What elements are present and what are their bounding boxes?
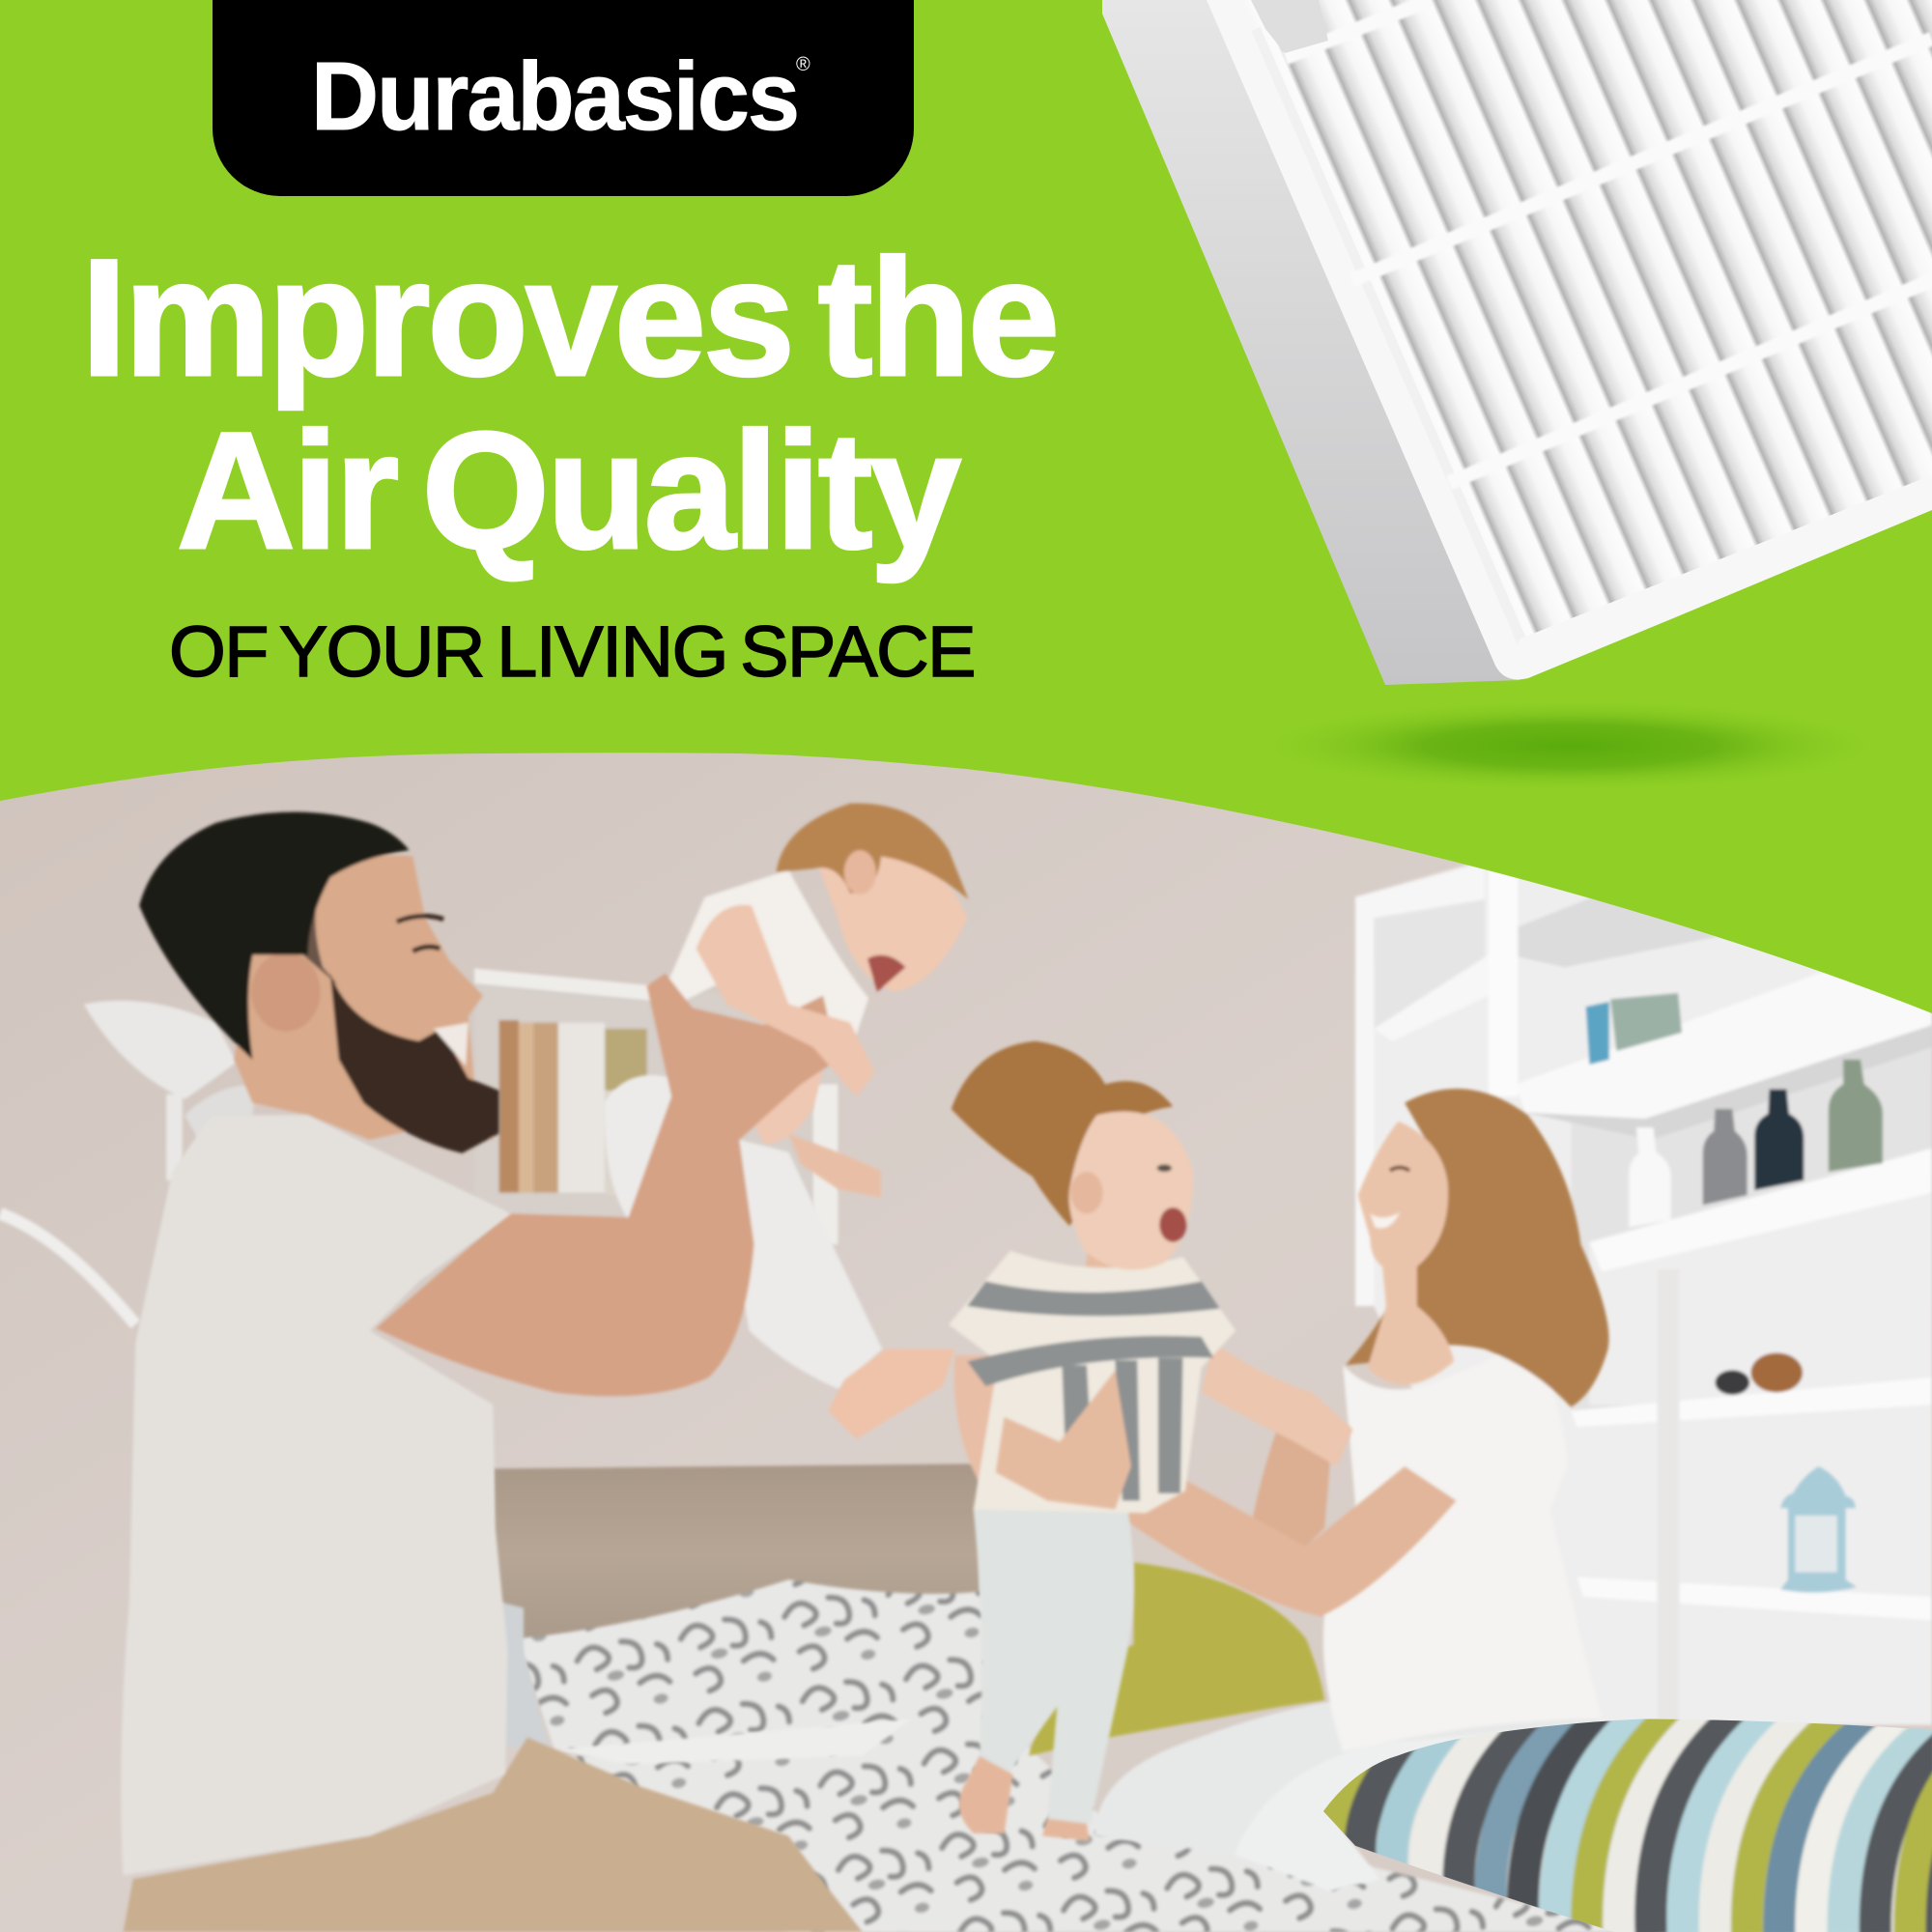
baby's ear: [844, 850, 876, 895]
brand name: Durabasics: [311, 43, 798, 151]
pale blue pillow: [499, 1602, 549, 1747]
woman's eye: [1390, 1168, 1409, 1171]
inner border of media: [1256, 29, 1521, 639]
woman's t-shirt: [1323, 1343, 1602, 1752]
man's t-shirt: [121, 1115, 511, 1875]
bottles: [1629, 1127, 1671, 1227]
yellow-green cushion: [1029, 1562, 1324, 1756]
woman's trousers: [1094, 1700, 1602, 1886]
baby's head: [819, 852, 967, 992]
headline line 2: Air Quality: [177, 398, 960, 583]
filter side wall: [1102, 0, 1520, 685]
bookshelf unit: [1355, 860, 1932, 1725]
man's hair fade: [296, 877, 339, 985]
girl's feet: [959, 1756, 1012, 1833]
coconut ornaments: [1750, 1352, 1803, 1392]
shelf boards: [1516, 967, 1932, 1119]
woman's face and neck: [1358, 1122, 1454, 1384]
woman: [1094, 1089, 1609, 1891]
girl's striped shirt: [949, 1251, 1236, 1513]
baby's mouth: [867, 955, 905, 992]
girl's leggings: [974, 1506, 1133, 1824]
filter drop shadow: [1241, 697, 1898, 794]
man's beard: [330, 974, 499, 1153]
girl's ear: [1070, 1172, 1103, 1213]
patterned pillows: [518, 1579, 1023, 1749]
photo: family playing on a bed: [0, 739, 1932, 1932]
striped bolster pillow: [1319, 1710, 1932, 1932]
headline: [81, 225, 1057, 583]
baby's trousers: [604, 1075, 882, 1388]
baby's upper arm: [696, 905, 875, 1096]
girl: [949, 1041, 1352, 1841]
subheadline: OF YOUR LIVING SPACE: [169, 611, 975, 692]
woman's smile: [1370, 1212, 1400, 1228]
baby: [376, 804, 969, 1439]
wall niche with books: [474, 969, 838, 1244]
floor lamp: [0, 1001, 256, 1324]
black tab: [213, 0, 914, 196]
baby's shirt: [653, 870, 868, 1047]
girl's eye: [1157, 1164, 1172, 1172]
man's trousers: [124, 1737, 863, 1932]
registered mark: ®: [796, 54, 810, 75]
man's head and neck skin: [234, 855, 499, 1140]
headline line 1: Improves the: [81, 225, 1057, 411]
room wall: [0, 739, 1932, 1932]
girl's neck: [1084, 1233, 1152, 1282]
girl's face: [1068, 1112, 1193, 1270]
baby's curly hair: [777, 804, 969, 899]
man's mouth: [434, 1023, 469, 1065]
air filter product: [1102, 0, 1932, 685]
woman's hair: [1346, 1089, 1609, 1407]
headboard: [493, 1463, 980, 1645]
girl's mouth: [1159, 1208, 1186, 1242]
baby's tummy: [739, 1060, 826, 1144]
woman's hand on girl: [996, 1370, 1131, 1509]
baby's lower arm: [788, 1133, 881, 1198]
filter corner tab: [1251, 0, 1328, 53]
bed sheet: [529, 1707, 1638, 1932]
man's forearm and hand: [376, 974, 838, 1396]
woman's far arm: [1251, 1417, 1331, 1547]
blue and green boxes: [1586, 1002, 1609, 1065]
filter white frame: [1207, 0, 1932, 679]
pleated media: [1240, 0, 1932, 645]
logo tab: [213, 0, 914, 196]
girl's hair bun: [952, 1041, 1173, 1226]
man's hair: [139, 812, 409, 1060]
filter support bands: [1285, 0, 1932, 483]
woman's near arm: [1115, 1441, 1457, 1616]
baby's foot: [828, 1350, 955, 1439]
blue lantern: [1780, 1466, 1857, 1593]
girl's arms: [1202, 1343, 1352, 1466]
man's ear: [251, 952, 321, 1032]
man's eyebrow and eye: [397, 916, 443, 952]
green header background with curved edge: [0, 0, 1932, 1013]
man: [121, 812, 863, 1932]
